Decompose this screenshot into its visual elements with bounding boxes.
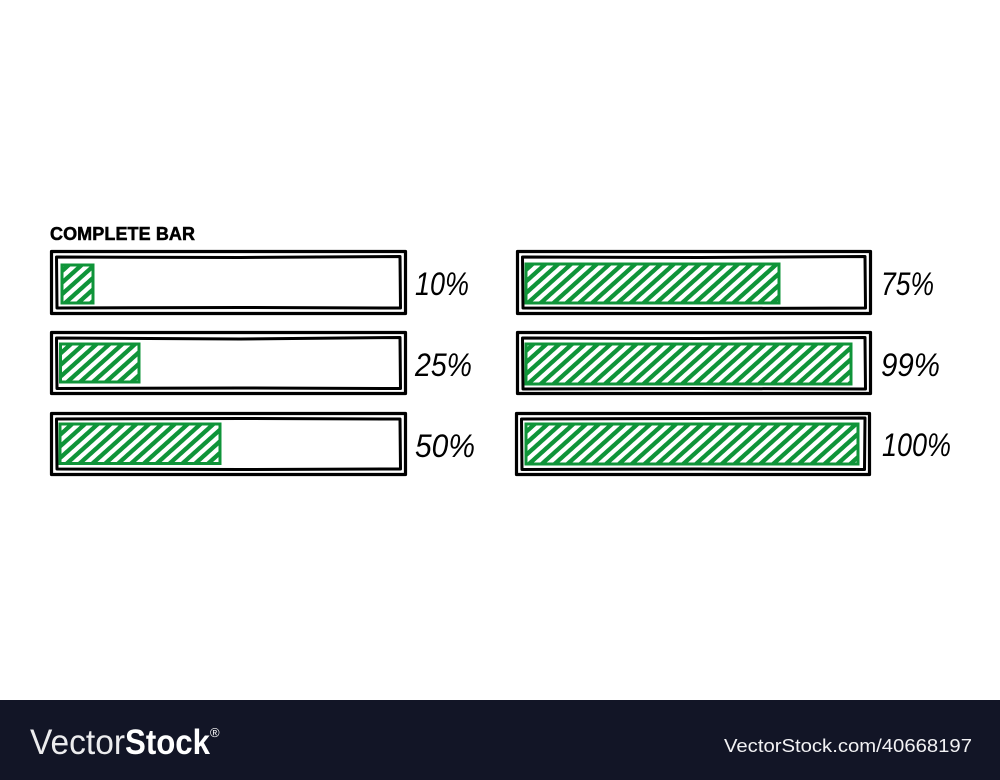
footer logo: ®: [210, 725, 220, 740]
progress bar: 75%: [518, 252, 934, 314]
progress bar: 50%: [52, 414, 475, 474]
footer logo: [30, 723, 220, 762]
footer logo: Stock: [125, 723, 210, 762]
progress bar: 10%: 10%: [415, 266, 469, 302]
footer band: [0, 700, 1000, 780]
footer image id: VectorStock.com/40668197: [724, 735, 972, 756]
title: COMPLETE BAR: [50, 224, 195, 244]
progress bar: 10%: [52, 252, 469, 314]
progress bar: 100%: [516, 414, 951, 474]
progress bar: 25%: [52, 332, 472, 394]
footer logo: Vector: [30, 723, 125, 762]
progress bar: 75%: 75%: [881, 266, 934, 302]
progress bar: 25%: 25%: [414, 347, 472, 383]
progress bar: 99%: [518, 332, 940, 394]
progress bar: 50%: 50%: [415, 428, 475, 464]
progress bar: 100%: 100%: [882, 427, 951, 463]
progress bar: 99%: 99%: [881, 347, 940, 383]
